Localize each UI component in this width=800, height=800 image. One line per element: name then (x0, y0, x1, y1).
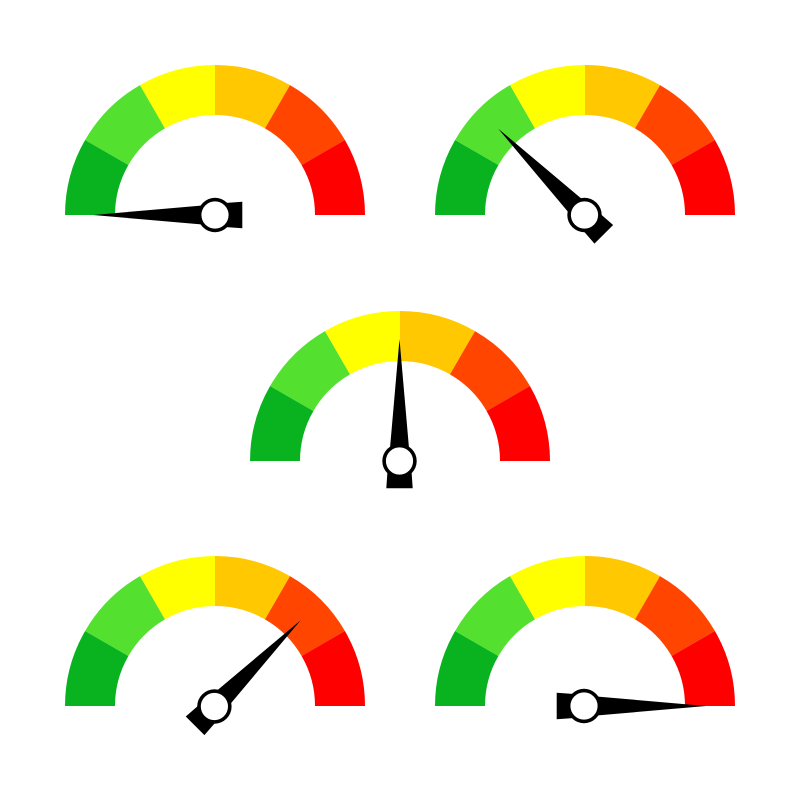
gauge 2: needle pointing at light green (435, 65, 735, 246)
colour arc (435, 65, 735, 215)
needle (557, 689, 706, 723)
colour arc (250, 311, 550, 461)
colour arc (65, 556, 365, 706)
gauge 3: needle pointing at centre (250, 311, 550, 488)
colour arc (65, 65, 365, 215)
needle (93, 198, 242, 232)
colour arc (435, 556, 735, 706)
gauge 5: needle pointing at high red (435, 556, 735, 723)
needle (183, 608, 313, 738)
gauge 4: needle pointing at orange-red (65, 556, 365, 738)
needle (486, 117, 616, 246)
needle (382, 339, 417, 488)
gauge 1: needle pointing at low green (65, 65, 365, 232)
